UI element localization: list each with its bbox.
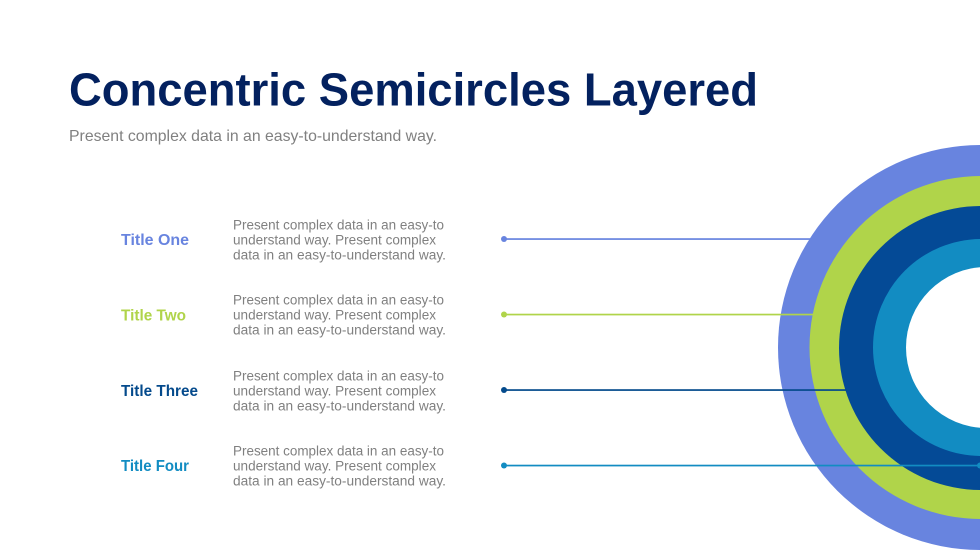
- item: Title One: Title One: [121, 232, 189, 249]
- item: Title One: [121, 218, 810, 262]
- item: Title Four: understand way. Present complex: [233, 458, 436, 474]
- item: Title Three: [121, 368, 847, 414]
- item: Title Two: [121, 292, 813, 338]
- item: Title Three: understand way. Present complex: [233, 384, 436, 398]
- item: Title Two: Present complex data in an easy-to: [233, 292, 444, 308]
- item: Title Three: Present complex data in an easy-to: [233, 368, 444, 384]
- concentric semicircles chart: [778, 145, 980, 550]
- item: Title Four: data in an easy-to-understand way.: [233, 474, 446, 488]
- item: Title Three: Title Three: [121, 383, 198, 400]
- item: Title Four: Present complex data in an easy-to: [233, 444, 444, 458]
- title: Concentric Semicircles Layered: [69, 64, 758, 116]
- item: Title One: data in an easy-to-understand way.: [233, 248, 446, 262]
- item: Title Three: data in an easy-to-understand way.: [233, 398, 446, 414]
- item: Title Two: Title Two: [121, 308, 186, 324]
- subtitle: Present complex data in an easy-to-understand way.: [69, 128, 437, 145]
- item: Title Four: Title Four: [121, 458, 189, 475]
- item: Title One: Present complex data in an easy-to: [233, 218, 444, 232]
- item: Title Four: [121, 444, 980, 488]
- item: Title Two: data in an easy-to-understand way.: [233, 322, 446, 338]
- item: Title Two: understand way. Present complex: [233, 308, 436, 322]
- item: Title One: understand way. Present complex: [233, 232, 436, 248]
